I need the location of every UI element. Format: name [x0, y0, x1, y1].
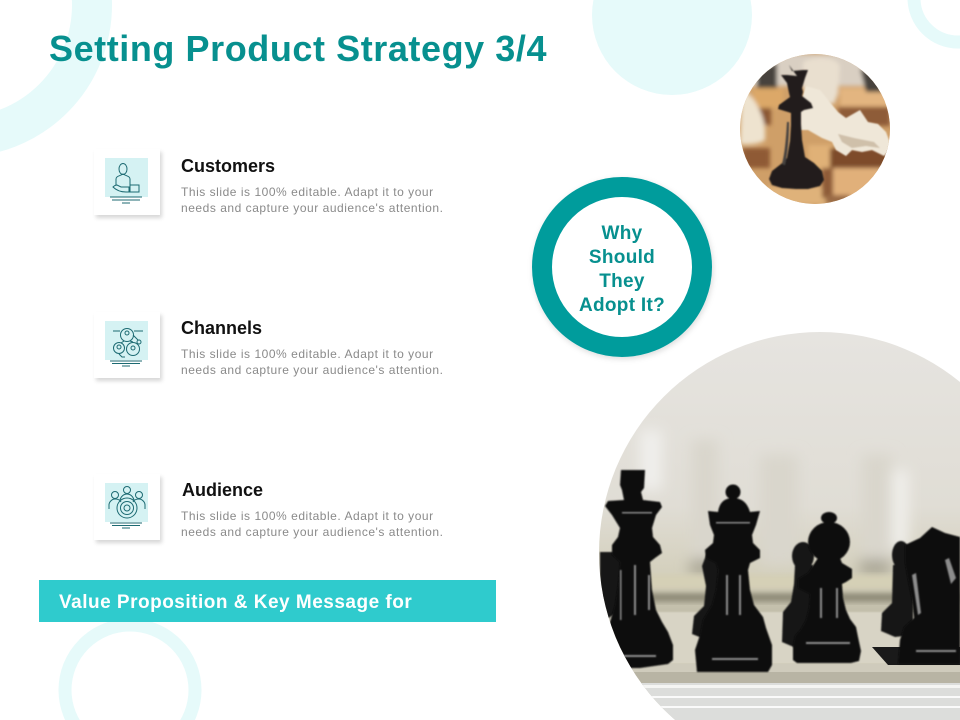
channels text: [181, 347, 443, 377]
board surface: [609, 612, 914, 664]
icon card: audience: [94, 474, 160, 540]
black queen: [769, 65, 824, 189]
black knight: [898, 527, 960, 664]
icon card: channels: [94, 312, 160, 378]
donut label: Should: [589, 247, 655, 268]
title: Setting Product Strategy 3/4: [49, 28, 547, 69]
audience text: This slide is 100% editable. Adapt it to your: [181, 509, 434, 523]
audience text: [181, 509, 443, 539]
channels text: needs and capture your audience's attention.: [181, 363, 443, 377]
black queen: [695, 484, 772, 672]
channels heading: Channels: [181, 318, 262, 338]
icon: person with laptop: [105, 158, 148, 203]
decorative circle top centre: [592, 0, 752, 95]
audience heading: Audience: [182, 480, 263, 500]
audience text: needs and capture your audience's attention.: [181, 525, 443, 539]
piece highlights: [616, 512, 956, 660]
fallen white king: [796, 86, 892, 156]
icon: connected people network: [105, 321, 148, 366]
icon card: customers: [94, 149, 160, 215]
black pieces group: [605, 470, 960, 672]
photo: small chess circle: [740, 54, 892, 204]
customers text: needs and capture your audience's attention.: [181, 201, 443, 215]
channels text: This slide is 100% editable. Adapt it to your: [181, 347, 434, 361]
photo: large chess circle: [590, 330, 960, 720]
donut label: Why: [601, 223, 642, 244]
donut label: Adopt It?: [579, 295, 665, 316]
icon: group of people with target: [105, 483, 148, 528]
rear black pawns: [600, 541, 913, 648]
customers heading: Customers: [181, 156, 275, 176]
customers text: [181, 185, 443, 215]
decorative ring bottom left: [65, 625, 195, 720]
decorative ring top left: [0, 0, 92, 137]
customers text: This slide is 100% editable. Adapt it to your: [181, 185, 434, 199]
black king: [605, 470, 673, 668]
donut label: [579, 223, 665, 316]
dark board square: [872, 647, 960, 665]
decorative ring top right: [914, 0, 960, 42]
donut label: They: [599, 271, 645, 292]
value proposition banner: Value Proposition & Key Message for: [59, 592, 412, 613]
blurred white pieces: [640, 430, 908, 574]
value proposition banner: [39, 580, 496, 622]
black bishop: [793, 512, 861, 663]
donut ring: [542, 187, 702, 347]
